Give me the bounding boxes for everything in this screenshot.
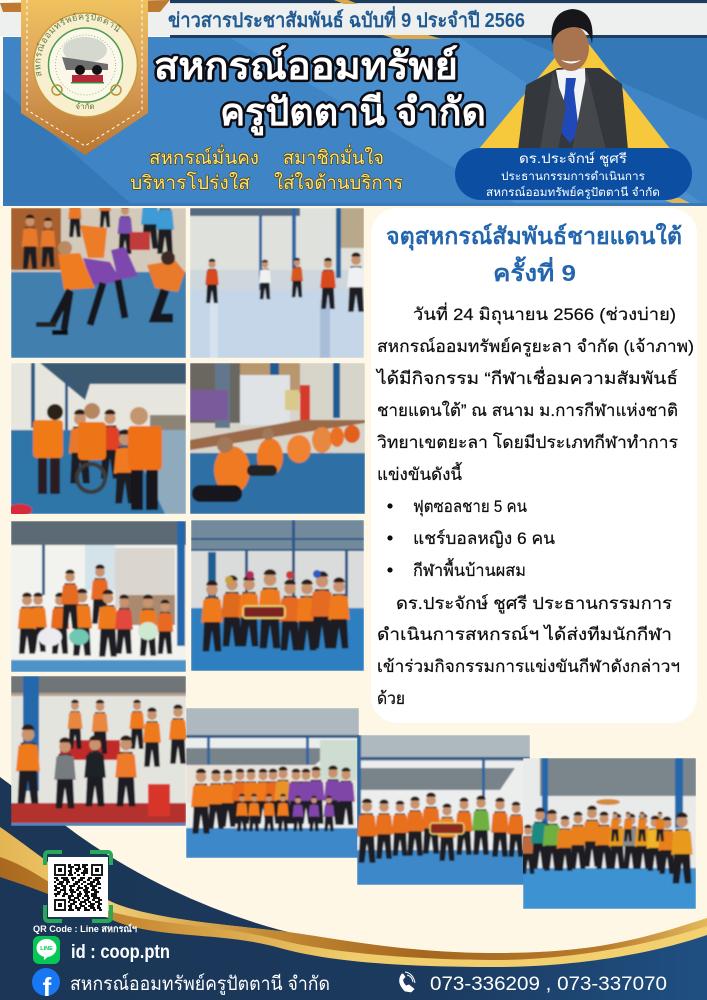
logo: circular seal bbox=[32, 12, 138, 118]
slogans: บริหารโปร่งใส bbox=[130, 171, 250, 194]
article body: วันที่ 24 มิถุนายน 2566 (ช่วงบ่าย) bbox=[413, 302, 676, 325]
footer navy wedge bbox=[0, 777, 707, 1000]
article body: กีฬาพื้นบ้านผสม bbox=[413, 558, 526, 580]
slogans: ใส่ใจด้านบริการ bbox=[274, 172, 403, 194]
article heading: ครั้งที่ 9 bbox=[493, 256, 576, 286]
main title: ครูปัตตานี จำกัด bbox=[220, 92, 486, 136]
article body: ได้มีกิจกรรม “กีฬาเชื่อมความสัมพันธ์ bbox=[375, 366, 678, 388]
icon: telephone bbox=[400, 972, 415, 992]
article body: เข้าร่วมกิจกรรมการแข่งขันกีฬาดังกล่าวฯ bbox=[377, 657, 680, 676]
chairman name plate: ดร.ประจักษ์ ชูศรี bbox=[519, 151, 627, 167]
QR caption: QR Code : Line สหกรณ์ฯ bbox=[33, 923, 137, 935]
icon: Facebook bbox=[32, 968, 60, 1000]
photo 4: sitting row game bbox=[190, 363, 365, 514]
photo 5: dance team in tutus bbox=[11, 521, 186, 672]
Facebook name: สหกรณ์ออมทรัพย์ครูปัตตานี จำกัด bbox=[70, 973, 330, 995]
icon: LINE bbox=[33, 936, 60, 964]
article card bbox=[371, 208, 697, 723]
photo 8: women's team group bbox=[186, 708, 359, 858]
chairman name plate bbox=[455, 148, 692, 200]
article heading: จตุสหกรณ์สัมพันธ์ชายแดนใต้ bbox=[386, 222, 682, 251]
article body: ดำเนินการสหกรณ์ฯ ได้ส่งทีมนักกีฬา bbox=[377, 624, 672, 644]
chairman portrait bbox=[478, 9, 671, 150]
header banner bbox=[0, 0, 707, 208]
main title: สหกรณ์ออมทรัพย์ bbox=[154, 45, 458, 88]
footer gold ribbon bbox=[0, 827, 707, 967]
photo 6: team with banner bbox=[191, 520, 364, 671]
article body: ชายแดนใต้” ณ สนาม ม.การกีฬาแห่งชาติ bbox=[377, 400, 678, 420]
QR code bbox=[45, 852, 111, 921]
photo 7: seated officials bbox=[11, 676, 187, 826]
article heading bbox=[386, 222, 682, 286]
article body: วิทยาเขตยะลา โดยมีประเภทกีฬาทำการ bbox=[377, 432, 678, 452]
article body bbox=[375, 302, 694, 708]
photo 2: futsal match bbox=[190, 208, 365, 358]
photo 10: full delegation bbox=[520, 758, 696, 909]
article body: แชร์บอลหญิง 6 คน bbox=[413, 529, 555, 548]
main title bbox=[154, 45, 486, 136]
logo: circular seal: จำกัด bbox=[75, 102, 95, 111]
chairman name plate: ประธานกรรมการดำเนินการ bbox=[501, 170, 645, 183]
slogans: สมาชิกมั่นใจ bbox=[283, 144, 384, 169]
icon: LINE: LINE bbox=[40, 946, 53, 952]
article body: ด้วย bbox=[377, 689, 405, 708]
logo: circular seal: สหกรณ์ออมทรัพย์ครูปัตตานี bbox=[36, 12, 122, 76]
photo 9: men's team group bbox=[357, 735, 530, 885]
article body: แข่งขันดังนี้ bbox=[377, 462, 462, 484]
chairman name plate: สหกรณ์ออมทรัพย์ครูปัตตานี จำกัด bbox=[486, 185, 660, 199]
article body: ดร.ประจักษ์ ชูศรี ประธานกรรมการ bbox=[396, 594, 672, 614]
header: newsletter issue line: ข่าวสารประชาสัมพันธ์ ฉบับที่ 9 ประจำปี 2566 bbox=[168, 5, 525, 32]
photo 3: team with tyre bbox=[8, 363, 186, 516]
article body: สหกรณ์ออมทรัพย์ครูยะลา จำกัด (เจ้าภาพ) bbox=[377, 337, 694, 357]
phone numbers: 073-336209 , 073-337070 bbox=[430, 974, 667, 995]
photo 1: tug relay on court bbox=[11, 208, 186, 358]
slogans: สหกรณ์มั่นคง bbox=[149, 144, 259, 169]
article body: ฟุตซอลชาย 5 คน bbox=[413, 497, 527, 517]
gold ribbon with cooperative logo bbox=[0, 0, 170, 155]
slogans bbox=[130, 144, 403, 194]
LINE id: id : coop.ptn bbox=[71, 942, 170, 963]
